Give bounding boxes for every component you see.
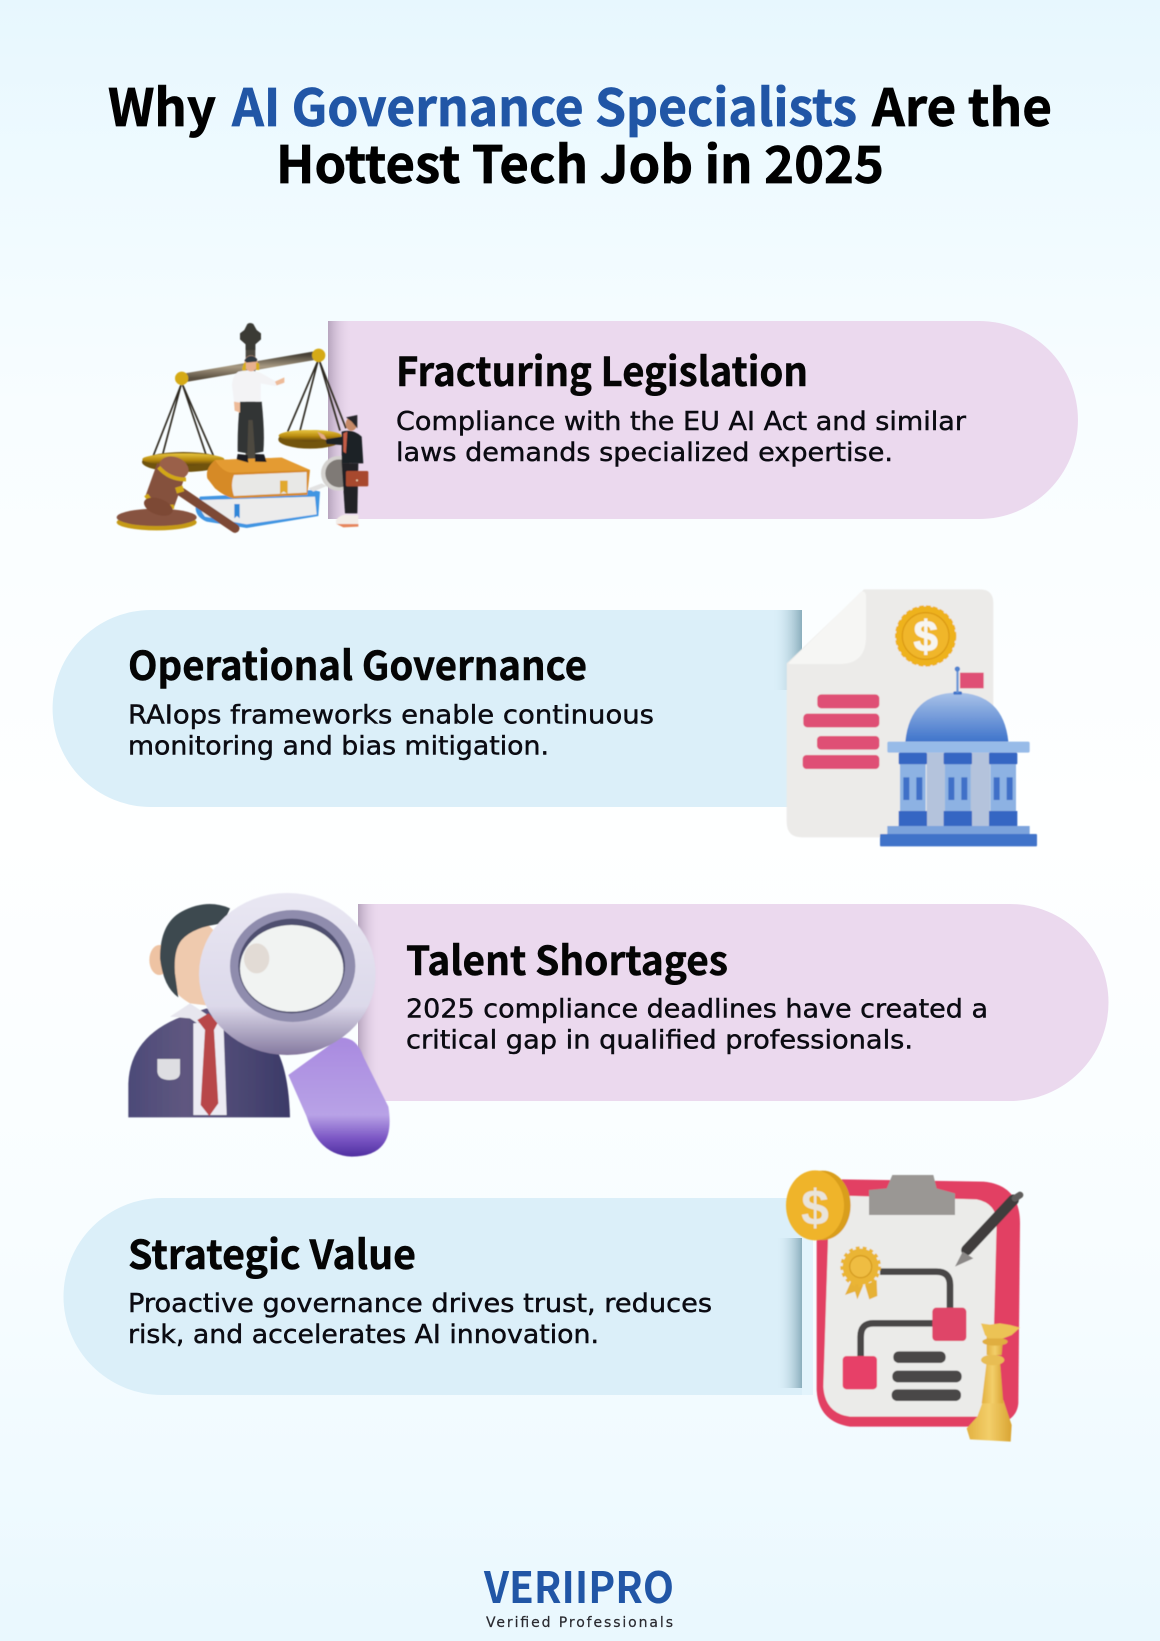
text: strategic value description: risk, and accelerates AI innovation. xyxy=(128,1320,599,1350)
text: operational governance description: monitoring and bias mitigation. xyxy=(128,732,549,762)
text: fracturing legislation description xyxy=(396,407,966,468)
logo: veriipro: VERIIPRO xyxy=(483,1554,674,1616)
heading: fracturing legislation: Fracturing Legislation xyxy=(396,340,808,398)
title xyxy=(108,67,1052,198)
person with briefcase xyxy=(317,415,368,527)
icon: scales of justice with gavel, books and people xyxy=(117,323,368,530)
coin: $ xyxy=(801,1180,829,1236)
text: talent shortages description: critical gap in qualified professionals. xyxy=(406,1026,913,1056)
panel: strategic value xyxy=(63,1198,813,1395)
panel: operational governance xyxy=(53,610,802,807)
red text bars xyxy=(803,694,879,769)
text: talent shortages description xyxy=(406,994,988,1056)
title: Are the xyxy=(871,67,1052,141)
title: Why xyxy=(108,67,216,141)
clipboard xyxy=(817,1179,1020,1427)
pen xyxy=(955,1195,1020,1267)
magnifier behind person xyxy=(308,456,356,492)
text: fracturing legislation description: laws demands specialized expertise. xyxy=(396,438,893,468)
text: strategic value description xyxy=(128,1289,712,1350)
title: AI Governance Specialists xyxy=(231,67,857,141)
award badge xyxy=(843,1249,879,1299)
panel: talent shortages xyxy=(358,904,1108,1101)
icon: businessman with magnifying glass xyxy=(128,893,390,1157)
icon: clipboard with flowchart, coin, pen and chess queen xyxy=(786,1170,1020,1442)
heading: strategic value: Strategic Value xyxy=(128,1223,416,1281)
chess queen xyxy=(967,1323,1020,1442)
heading: operational governance: Operational Governance xyxy=(128,634,587,692)
businessman xyxy=(128,904,290,1117)
icon: document with coin and government building xyxy=(787,589,1037,846)
coin xyxy=(786,1170,851,1240)
clip xyxy=(869,1175,955,1215)
book stack xyxy=(196,458,320,528)
government building xyxy=(880,666,1037,846)
panel: fracturing legislation xyxy=(328,321,1078,519)
title: Hottest Tech Job in 2025 xyxy=(276,124,884,198)
gavel xyxy=(117,453,235,530)
heading: talent shortages: Talent Shortages xyxy=(406,929,728,987)
text: operational governance description xyxy=(128,700,654,762)
text: fracturing legislation description: Compliance with the EU AI Act and similar xyxy=(396,407,966,437)
flowchart xyxy=(843,1272,966,1401)
coin xyxy=(896,606,955,666)
magnifying glass xyxy=(199,893,390,1157)
text: talent shortages description: 2025 compliance deadlines have created a xyxy=(406,994,988,1024)
logo: veriipro: Verified Professionals xyxy=(486,1615,673,1631)
text: operational governance description: RAIops frameworks enable continuous xyxy=(128,700,654,730)
person in white sweater xyxy=(232,355,284,463)
coin: $ xyxy=(914,614,938,662)
text: strategic value description: Proactive governance drives trust, reduces xyxy=(128,1289,712,1319)
